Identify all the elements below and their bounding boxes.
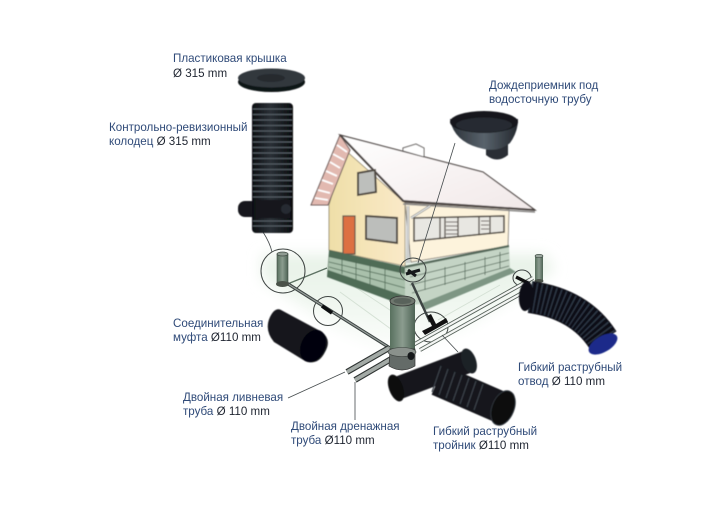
small tee on pipe — [422, 314, 448, 335]
small shaft left — [276, 252, 289, 287]
ground pipes — [285, 278, 540, 350]
roof — [340, 135, 535, 210]
label: flexible bend: отвод — [518, 375, 552, 388]
label: inspection well: колодец — [109, 135, 157, 148]
gable window — [358, 170, 376, 195]
label: coupling: муфта — [173, 331, 211, 344]
icon: plastic lid — [238, 68, 305, 92]
label: double storm pipe: труба — [183, 405, 217, 418]
gable trim ladder — [311, 135, 350, 205]
label: double drainage pipe: Ø110 mm — [325, 434, 375, 447]
label: plastic lid: Ø 315 mm — [173, 67, 227, 80]
house — [311, 135, 535, 310]
label: rain receiver: Дождеприемник под — [489, 79, 598, 92]
label: flexible tee: тройник — [433, 439, 479, 452]
ground area — [262, 255, 555, 360]
icon: rain receiver — [450, 111, 518, 160]
label: plastic lid: Пластиковая крышка — [173, 52, 287, 65]
left wall — [329, 150, 405, 266]
label: inspection well: Контрольно-ревизионный — [109, 121, 247, 134]
label: rain receiver: водосточную трубу — [489, 93, 592, 106]
label: flexible tee: Ø110 mm — [479, 439, 529, 452]
icon: flexible bend — [518, 280, 621, 359]
veranda windows — [414, 216, 504, 241]
label: double drainage pipe: Двойная дренажная — [291, 420, 400, 433]
door — [343, 216, 355, 254]
label: inspection well: Ø 315 mm — [157, 135, 211, 148]
label: double drainage pipe: труба — [291, 434, 325, 447]
foundation left — [327, 250, 405, 306]
label: coupling: Соединительная — [173, 317, 263, 330]
label: double storm pipe: Двойная ливневая — [183, 391, 283, 404]
icon: flexible tee — [385, 346, 520, 429]
double pipes at well — [347, 348, 398, 380]
small shaft right — [534, 254, 544, 283]
label: double storm pipe: Ø 110 mm — [217, 405, 270, 418]
label: coupling: Ø110 mm — [211, 331, 261, 344]
large inspection shaft — [388, 296, 416, 370]
icon: inspection well — [238, 103, 293, 233]
right wall — [405, 203, 509, 262]
callout circles on plan — [261, 249, 531, 342]
label: flexible bend: Ø 110 mm — [552, 375, 605, 388]
eave line — [340, 135, 535, 210]
small fitting at downpipe — [406, 270, 420, 276]
downpipe — [408, 206, 430, 263]
label: flexible tee: Гибкий раструбный — [433, 425, 537, 438]
icon: coupling sleeve — [268, 309, 331, 366]
label: flexible bend: Гибкий раструбный — [518, 361, 622, 374]
leader lines — [263, 143, 458, 420]
small fitting on right pipe — [516, 277, 528, 283]
front window — [366, 216, 397, 243]
foundation right — [405, 246, 510, 306]
chimney — [403, 144, 424, 157]
